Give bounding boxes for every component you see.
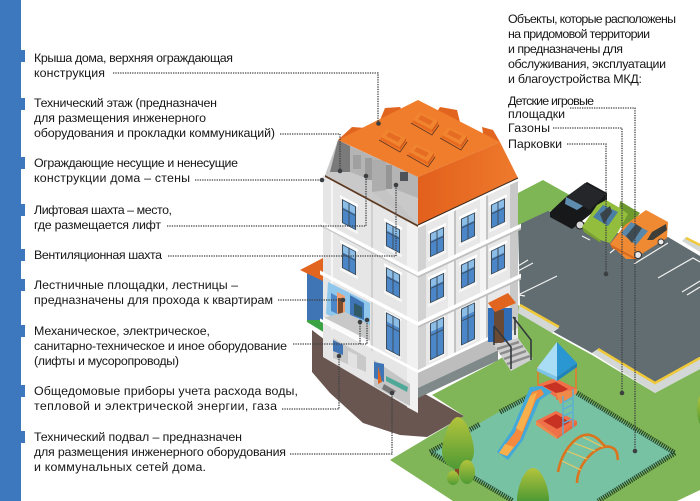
label: roof: конструкция: [34, 66, 105, 80]
slide: [497, 386, 552, 460]
label: lift shaft: Лифтовая шахта – место,: [34, 203, 172, 217]
label: roof: Крыша дома, верхняя ограждающая: [34, 51, 233, 65]
cutaway: basement machinery: [374, 360, 410, 406]
label: meters: Общедомовые приборы учета расхода воды,: [34, 384, 298, 398]
playground: [430, 342, 675, 501]
lawn: [390, 305, 700, 501]
label: stairs: предназначены для прохода к квартирам: [34, 293, 273, 307]
heading: adjacent territory objects: обслуживания, эксплуатации: [508, 57, 666, 71]
right facade: [418, 177, 521, 398]
heading: adjacent territory objects: на придомовой территории: [508, 27, 650, 41]
climbing arch: [558, 435, 618, 483]
list: territory objects: [508, 94, 594, 151]
leader: parking: [567, 144, 608, 276]
side annex: [300, 258, 325, 333]
label: lift shaft: [34, 203, 172, 232]
leader: basement: [290, 391, 394, 454]
label: basement: [34, 430, 286, 474]
heading: adjacent territory objects: [508, 12, 676, 86]
label: roof: [34, 51, 233, 80]
leader: roof: [113, 73, 381, 126]
heading: adjacent territory objects: и предназначены для: [508, 42, 623, 56]
leader: stairs: [278, 298, 345, 302]
label: meters: [34, 384, 298, 413]
label: technical floor: [34, 96, 275, 140]
roof: [338, 100, 518, 225]
label: equipment: санитарно-техническое и иное оборудование: [34, 339, 287, 353]
leader: equipment: [293, 318, 369, 344]
list: territory objects: Газоны: [508, 121, 550, 135]
label: walls: Ограждающие несущие и ненесущие: [34, 156, 238, 170]
left facade: [320, 173, 418, 413]
entrance porch: [488, 293, 533, 371]
left blue bar with tabs: [0, 0, 25, 501]
cutaway: stairwell floor: [323, 282, 370, 345]
list: territory objects: Детские игровые: [508, 94, 594, 108]
orange car: [610, 210, 668, 260]
heading: adjacent territory objects: Объекты, которые расположены: [508, 12, 676, 26]
label: technical floor: Технический этаж (предназначен: [34, 96, 217, 110]
basement earth: [312, 330, 464, 437]
label: stairs: [34, 278, 273, 307]
label: basement: Технический подвал – предназначен: [34, 430, 242, 444]
parking lot asphalt with curb: [518, 180, 700, 393]
safety surface with hedge: [430, 380, 675, 501]
label: equipment: (лифты и мусоропроводы): [34, 354, 179, 368]
label: technical floor: для размещения инженерного: [34, 111, 206, 125]
label: equipment: [34, 324, 287, 368]
leader: lift shaft: [167, 174, 368, 226]
heading: adjacent territory objects: и благоустройства МКД:: [508, 72, 642, 86]
label: lift shaft: где размещается лифт: [34, 218, 161, 232]
label: technical floor: оборудования и прокладки коммуникаций): [34, 126, 275, 140]
attic cutaway: [325, 140, 418, 227]
leader: meters: [282, 354, 341, 409]
parked cars: [550, 182, 668, 260]
label: basement: и коммунальных сетей дома.: [34, 460, 206, 474]
label: walls: [34, 156, 238, 185]
green car: [582, 200, 640, 243]
list: territory objects: площадки: [508, 107, 565, 121]
label: meters: тепловой и электрической энергии, газа: [34, 399, 277, 413]
tower: [536, 342, 577, 439]
trees: [442, 394, 700, 501]
list: territory objects: Парковки: [508, 137, 562, 151]
cutaway: utility room: [333, 338, 366, 372]
leader: ventilation shaft: [168, 183, 398, 256]
label: basement: для размещения инженерного оборудования: [34, 445, 286, 459]
label: walls: конструкции дома – стены: [34, 171, 190, 185]
black car: [550, 182, 607, 229]
leader: walls: [195, 178, 324, 182]
leader: technical floor: [280, 134, 342, 173]
label: equipment: Механическое, электрическое,: [34, 324, 210, 338]
leader: playgrounds: [570, 108, 637, 453]
ladder: [563, 389, 573, 435]
label: stairs: Лестничные площадки, лестницы –: [34, 278, 238, 292]
building: [320, 100, 533, 413]
tower roof: [537, 342, 557, 377]
label: ventilation shaft: Вентиляционная шахта: [34, 248, 162, 262]
leader: lawns: [553, 128, 624, 395]
